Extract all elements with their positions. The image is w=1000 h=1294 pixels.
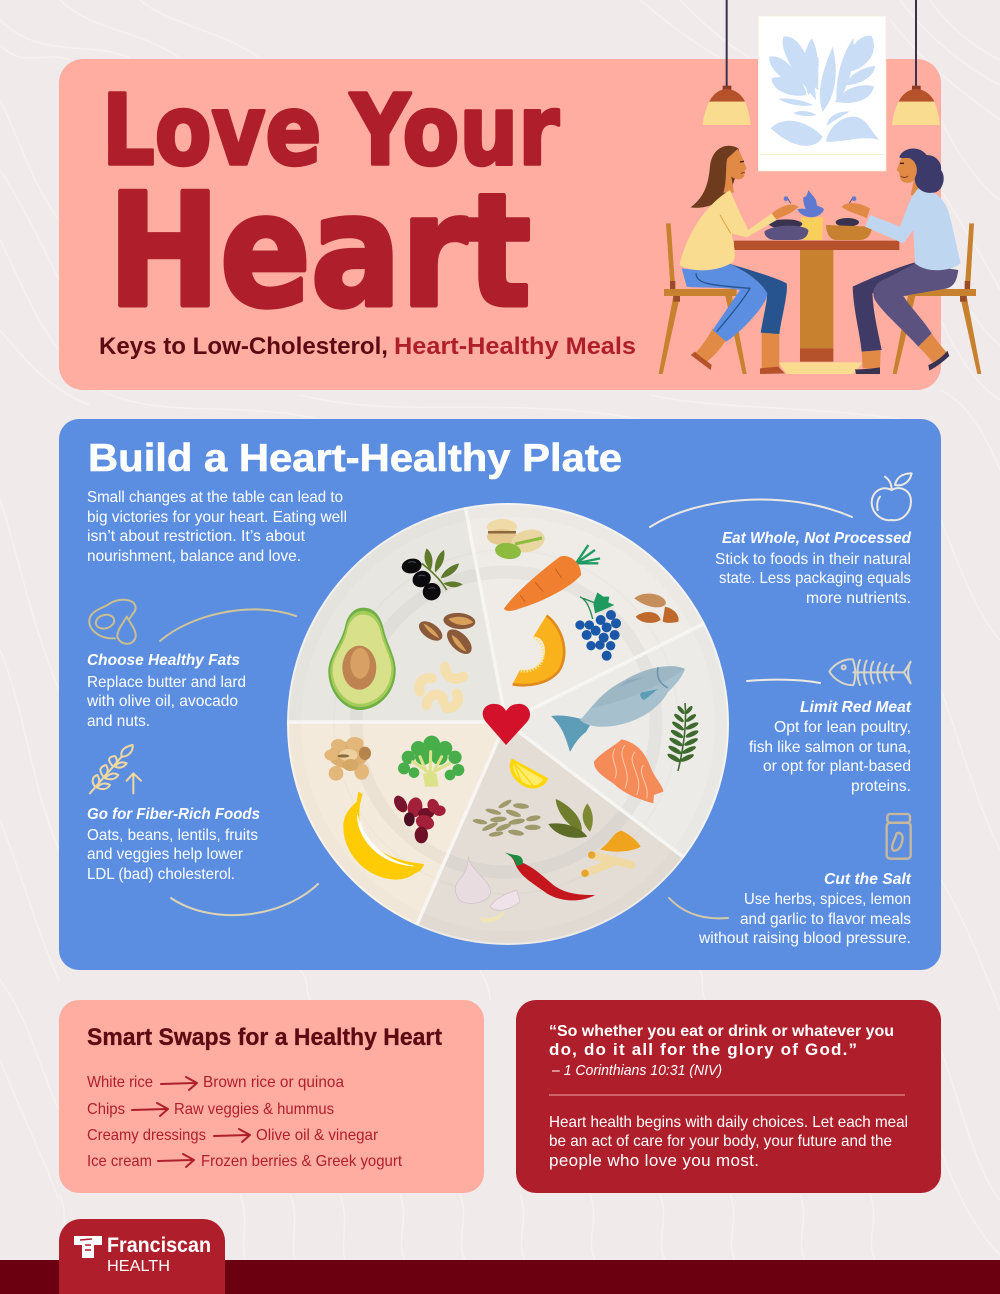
food: fish [551,666,685,752]
lamp: left pendant [703,0,751,125]
arrows: swap rows [132,1077,250,1167]
food: cashews [419,667,463,708]
illustration: two women dining at a table [659,0,981,374]
panel: build a heart-healthy plate [59,419,941,970]
callout: choose healthy fats: and nuts. [87,713,150,730]
callout: eat whole: more nutrients. [806,590,911,607]
bowl: left [764,219,808,240]
swap list [87,1074,403,1170]
callout: cut the salt: Cut the Salt [824,871,912,888]
swap list: Brown rice or quinoa [203,1074,344,1091]
woman: right diner [842,148,961,374]
right-top foods [504,545,679,685]
intro text: isn’t about restriction. It’s about [87,528,306,545]
swap list: Creamy dressings [87,1127,206,1144]
woman: left diner [679,146,798,374]
wall art: botanical print [758,16,886,171]
intro text: nourishment, balance and love. [87,548,301,565]
food: avocado [328,608,396,710]
logo: Franciscan Health: HEALTH [107,1258,170,1275]
icon: salt shaker [887,814,911,859]
callout: eat whole: Stick to foods in their natural [715,551,911,568]
callout: cut the salt: without raising blood pressure. [698,930,911,947]
icon: avocado and oil drop [89,600,136,644]
footer bar [0,1260,1000,1294]
callout: cut the salt: and garlic to flavor meals [740,911,911,928]
callout: limit red meat: Limit Red Meat [800,699,912,716]
callout: fiber-rich foods: LDL (bad) cholesterol. [87,866,235,883]
callout: cut the salt [698,871,912,947]
chair: left [659,223,747,374]
swap list: Olive oil & vinegar [256,1127,379,1144]
icon: wheat with up arrow [90,745,141,793]
closing message: people who love you most. [549,1151,759,1170]
subtitle: Heart-Healthy Meals [394,333,636,360]
heading: Build a Heart-Healthy Plate: Build a Heart-Healthy Plate [88,437,622,480]
callout: limit red meat [749,699,912,795]
panel: hero banner [59,59,941,390]
icon: apple [872,473,912,520]
logo: Franciscan Health: Franciscan [107,1234,211,1257]
top-left section foods [328,548,476,710]
icon: center heart [483,704,530,745]
callout: cut the salt: Use herbs, spices, lemon [744,891,911,908]
callout: choose healthy fats: Choose Healthy Fats [87,652,240,669]
callout: eat whole: Eat Whole, Not Processed [722,530,912,547]
bottom-left section foods [324,736,520,923]
callout: choose healthy fats: with olive oil, avocado [86,693,238,710]
intro text: big victories for your heart. Eating well [87,509,347,526]
callout: limit red meat: fish like salmon or tuna, [749,739,911,756]
food: carrot [504,545,600,611]
swap list: Chips [87,1101,125,1118]
right section foods [551,666,699,803]
food: olives [401,548,463,603]
table [734,241,899,374]
swap list: Raw veggies & hummus [174,1101,334,1118]
food: seeds [472,798,541,838]
swap list: Frozen berries & Greek yogurt [201,1153,403,1170]
food: turmeric [581,831,641,877]
title: Heart: Heart [108,160,531,342]
food: almonds [634,594,679,623]
panel: smart swaps [59,1000,484,1193]
closing message: be an act of care for your body, your future and the [549,1133,892,1150]
title: Love Your: Love Your [102,74,559,187]
connector: salt curve [669,898,728,918]
food: brazil nuts [416,612,476,658]
quote text [549,1023,894,1059]
callout: choose healthy fats: Replace butter and lard [87,674,246,691]
plate sections [287,503,729,945]
logo: Franciscan Health [59,1219,225,1294]
chair: right [893,223,981,374]
food: pistachios [487,519,547,561]
callout: fiber-rich foods [87,806,260,883]
subtitle: Keys to Low-Cholesterol, [99,333,388,360]
food: kidney beans [391,793,446,843]
swap list: White rice [87,1074,153,1091]
food: salmon fillet [594,739,663,803]
food: lemon wedge [510,758,548,788]
plant pot [797,190,824,240]
food: banana [343,792,424,880]
intro text: Small changes at the table can lead to [87,489,343,506]
closing message: Heart health begins with daily choices. Let each meal [549,1114,908,1131]
subtitle [99,333,636,360]
food: fern sprig [666,703,699,771]
callout: eat whole: state. Less packaging equals [719,570,911,587]
callout: fiber-rich foods: Go for Fiber-Rich Foods [87,806,260,823]
connector: eat whole curve [650,500,852,527]
swap list: Ice cream [87,1153,152,1170]
intro text [87,489,347,565]
bowl: right [826,218,872,240]
food: walnuts [324,737,371,781]
food: blueberries and grapes [575,592,621,661]
callout: eat whole [715,530,912,607]
connector: fiber curve [171,884,318,915]
top section foods [487,519,679,685]
icon: fish bone [829,659,911,685]
icon: logo cross [74,1236,102,1258]
connector: red meat curve [747,680,820,683]
callout: fiber-rich foods: and veggies help lower [87,846,244,863]
food: chili pepper [505,853,595,900]
callout: fiber-rich foods: Oats, beans, lentils, fruits [87,827,258,844]
callout: limit red meat: or opt for plant-based [763,758,911,775]
quote text: do, do it all for the glory of God.” [549,1040,857,1059]
chart: divided plate [287,503,729,945]
quote text: “So whether you eat or drink or whatever you [549,1023,894,1040]
food: broccoli [398,736,464,787]
food: pumpkin wedge [512,615,564,685]
food: garlic [455,857,520,923]
bottom-right section foods [472,758,641,900]
callout: limit red meat: Opt for lean poultry, [774,719,911,736]
quote citation: – 1 Corinthians 10:31 (NIV) [551,1063,722,1079]
callout: limit red meat: proteins. [851,778,911,795]
connector: healthy fats curve [160,609,296,641]
panel: scripture quote [516,1000,941,1193]
lamp: right pendant [892,0,940,125]
food: bay leaves [548,799,593,838]
heading: smart swaps: Smart Swaps for a Healthy Heart [87,1024,442,1051]
callout: choose healthy fats [86,652,246,730]
closing message [549,1114,908,1170]
